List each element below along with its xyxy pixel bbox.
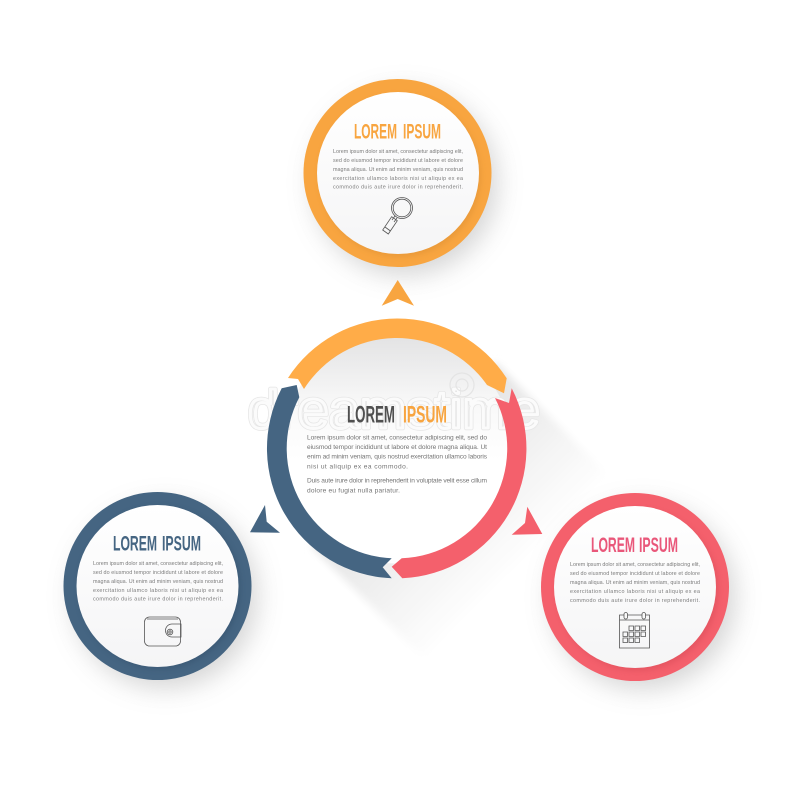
hub body text: nisi ut aliquip ex ea commodo.: [307, 464, 408, 470]
top body text: exercitation ullamco laboris nisi ut aliquip ex ea: [333, 176, 463, 182]
right heading: IPSUM: [639, 533, 678, 557]
blue ring: [64, 492, 252, 680]
left body text: commodo duis aute irure dolor in reprehenderit.: [93, 596, 223, 602]
top body text: sed do eiusmod tempor incididunt ut labore et dolore: [333, 158, 463, 164]
hub heading: LOREM: [347, 402, 395, 428]
right heading: LOREM: [591, 533, 635, 557]
watermark: dreamstime: [248, 380, 540, 440]
panel: central hub: [248, 318, 540, 578]
hub body text: Duis aute irure dolor in reprehenderit in voluptate velit esse cillum: [307, 478, 488, 484]
arrow: top orange: [382, 280, 414, 306]
icon: calendar: [620, 612, 650, 648]
top body text: commodo duis aute irure dolor in reprehenderit.: [333, 184, 463, 190]
arrow: right red: [512, 507, 542, 535]
left body text: magna aliqua. Ut enim ad minim veniam, quis nostrud: [93, 579, 223, 585]
panel: top orange circle: [304, 79, 497, 275]
top body text: magna aliqua. Ut enim ad minim veniam, quis nostrud: [333, 167, 463, 173]
left body text: [93, 561, 224, 602]
right body text: magna aliqua. Ut enim ad minim veniam, quis nostrud: [570, 580, 700, 586]
panel: left blue circle: [64, 492, 257, 688]
right body text: sed do eiusmod tempor incididunt ut labore et dolore: [570, 571, 700, 577]
hub body text: enim ad minim veniam, quis nostrud exercitation ullamco laboris: [307, 454, 488, 461]
orange ring: [304, 79, 492, 267]
right body text: exercitation ullamco laboris nisi ut aliquip ex ea: [570, 589, 700, 595]
left heading: IPSUM: [162, 532, 201, 556]
right body text: [570, 562, 700, 604]
left body text: Lorem ipsum dolor sit amet, consectetur adipiscing elit,: [93, 561, 224, 567]
top heading: IPSUM: [403, 120, 441, 144]
hub inner disc: [282, 334, 512, 564]
top body text: [333, 149, 464, 190]
right body text: commodo duis aute irure dolor in reprehenderit.: [570, 598, 700, 604]
red arc arrow: [392, 388, 526, 578]
hub body text: dolore eu fugiat nulla pariatur.: [307, 488, 400, 494]
right body text: Lorem ipsum dolor sit amet, consectetur adipiscing elit,: [570, 562, 700, 568]
blue arc arrow: [267, 385, 392, 578]
orange arc arrow: [288, 318, 507, 393]
center long shadow: [311, 362, 640, 691]
arrow: left blue: [250, 505, 280, 533]
top body text: Lorem ipsum dolor sit amet, consectetur adipiscing elit,: [333, 149, 464, 155]
top heading: LOREM: [354, 120, 397, 144]
icon: wallet: [144, 617, 181, 646]
hub body text: [307, 434, 488, 494]
left heading: LOREM: [113, 532, 157, 556]
panel: right red circle: [541, 493, 735, 689]
hub body text: eiusmod tempor incididunt ut labore et dolore magna aliqua. Ut: [307, 444, 487, 451]
watermark: dreamstime: [248, 380, 540, 440]
left body text: sed do eiusmod tempor incididunt ut labore et dolore: [93, 570, 223, 576]
hub heading: IPSUM: [403, 402, 447, 428]
left body text: exercitation ullamco laboris nisi ut aliquip ex ea: [93, 588, 223, 594]
red ring: [541, 493, 729, 681]
icon: magnifying glass: [383, 198, 412, 234]
hub body text: Lorem ipsum dolor sit amet, consectetur adipiscing elit, sed do: [307, 434, 487, 442]
